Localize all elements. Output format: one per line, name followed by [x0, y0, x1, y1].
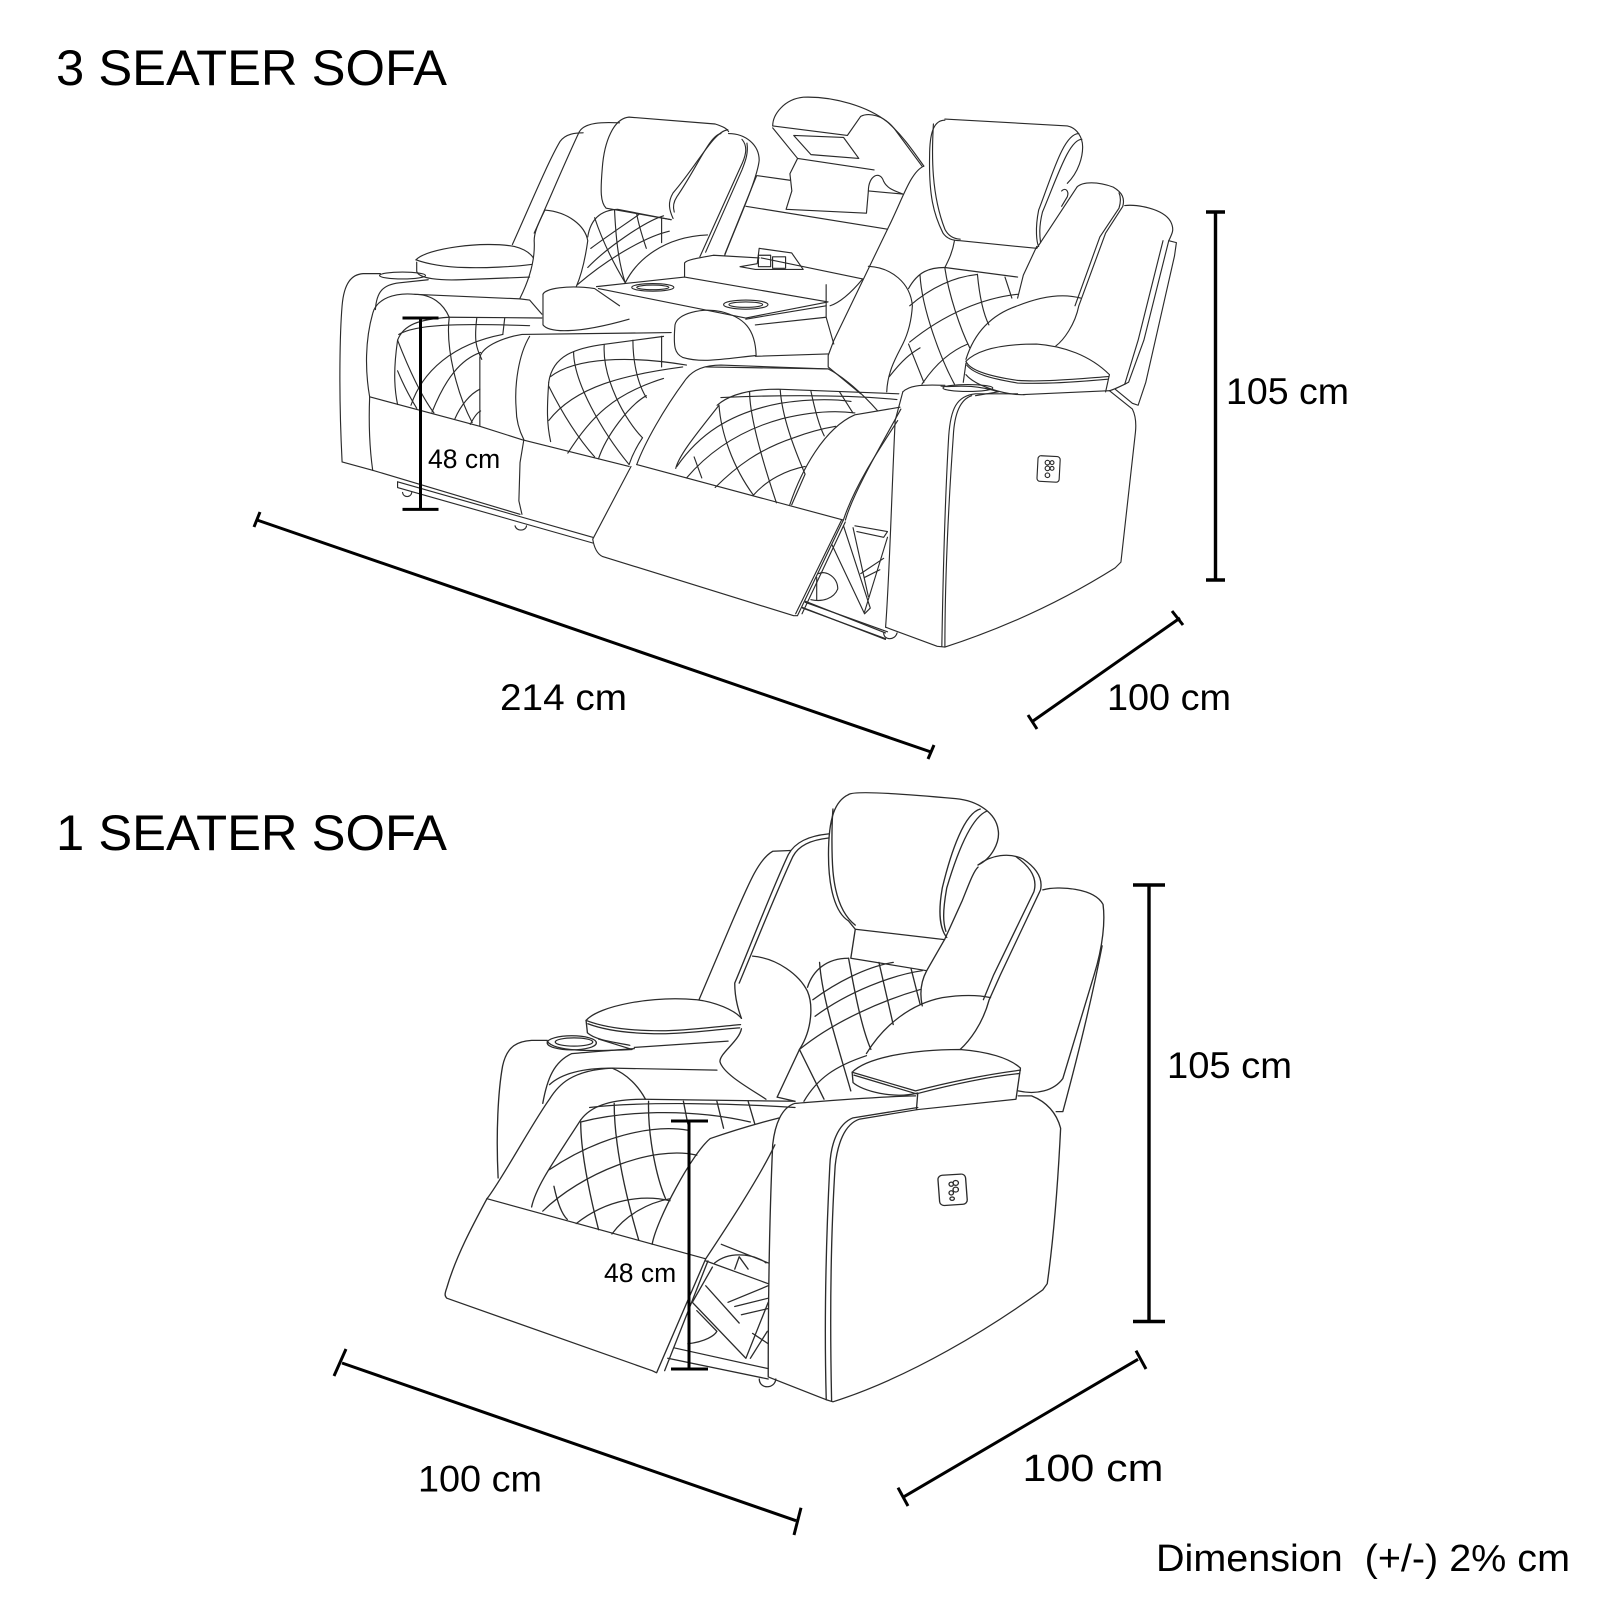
dimension: seat height 48 cm: [402, 318, 438, 509]
footrest: [445, 1068, 708, 1373]
right wing and outer back: [866, 855, 1104, 1112]
right armrest: [852, 1049, 1020, 1110]
label: 214 cm: 214 cm: [500, 677, 627, 718]
illustration: 1 seater sofa: [445, 793, 1104, 1402]
left seat quilting: [395, 317, 530, 424]
title: 1 seater sofa: 1 SEATER SOFA: [56, 805, 448, 861]
right back quilting: [889, 267, 1018, 384]
base rail and feet: [398, 482, 885, 639]
dimension: height 105 cm: [1133, 885, 1165, 1322]
dimension: width 100 cm: [334, 1349, 801, 1535]
fold-down centre headrest: [725, 97, 924, 254]
left bolster and lumbar: [699, 834, 828, 1099]
dimension: seat height 48 cm: [671, 1121, 708, 1369]
right seat pillar and lumbar: [761, 166, 924, 394]
right wing and outer back: [966, 183, 1176, 405]
left half of the 3 seater sofa: [340, 117, 900, 639]
power switch: [1037, 456, 1060, 482]
centre console and cup holders: [543, 255, 834, 369]
right armrest: [963, 344, 1109, 395]
illustration: 3 seater sofa: [340, 97, 1176, 647]
left back quilting: [577, 209, 671, 285]
back quilting: [777, 929, 927, 1101]
recline mechanism and foot: [668, 1244, 776, 1387]
power socket: [740, 248, 803, 269]
label: 100 cm: 100 cm: [1022, 1448, 1164, 1490]
left arm: [340, 272, 542, 514]
left armrest pillow: [416, 245, 533, 280]
label: 100 cm: 100 cm: [418, 1458, 542, 1500]
power switch: [938, 1174, 968, 1206]
right headrest: [930, 119, 1083, 298]
dimension: depth 100 cm: [898, 1351, 1146, 1506]
label: 100 cm: 100 cm: [1107, 677, 1231, 718]
recline mechanism: [796, 409, 901, 639]
left armrest: [586, 999, 741, 1047]
left backrest and headrest: [512, 117, 759, 298]
middle seat: [370, 333, 686, 514]
seat quilting: [532, 1099, 795, 1259]
recliner seat and footrest: [593, 365, 900, 616]
right arm block and piping: [886, 385, 1136, 647]
label: 48 cm: 48 cm: [428, 444, 500, 474]
footnote: dimension tolerance: Dimension (+/-) 2% cm: [1156, 1538, 1570, 1580]
left arm and cup holder: [497, 1036, 717, 1178]
label: 105 cm: 105 cm: [1226, 371, 1349, 412]
dimension: width 214 cm: [254, 512, 934, 759]
dimension: depth 100 cm: [1028, 611, 1183, 729]
dimension: height 105 cm: [1206, 212, 1225, 580]
title: 3 seater sofa: 3 SEATER SOFA: [56, 40, 448, 96]
label: 48 cm: 48 cm: [604, 1258, 676, 1288]
headrest: [828, 793, 998, 940]
right arm block and piping: [768, 1096, 1061, 1402]
right half of the 3 seater sofa: [725, 97, 1176, 647]
label: 105 cm: 105 cm: [1167, 1045, 1292, 1086]
